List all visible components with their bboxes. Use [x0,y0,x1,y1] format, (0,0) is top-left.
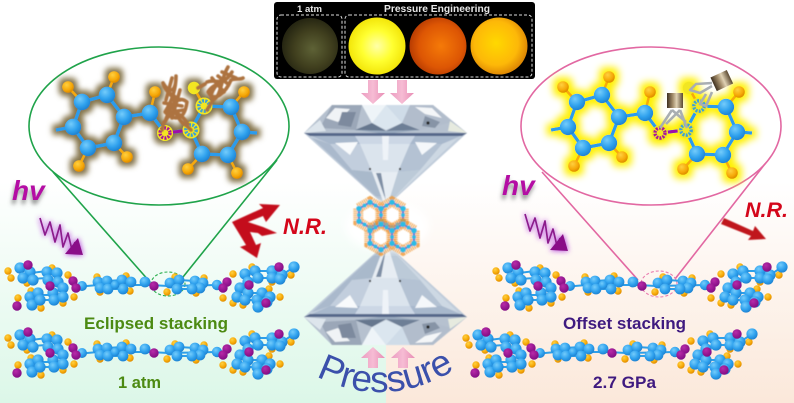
brown tangled rope [162,67,243,130]
label: offset stacking: Offset stacking [563,314,686,333]
diamond: bottom anvil [304,243,467,345]
wavy light arrow [525,214,568,251]
label: eclipsed stacking: Eclipsed stacking [84,314,228,333]
molecule stack: top row [4,260,300,313]
text: Pressure [318,354,452,392]
hexagon framework motif [345,200,429,252]
label: 1 atm: 1 atm [297,4,322,14]
zoom ellipse: green [29,47,289,205]
padlocks and chains [660,70,733,128]
diamond: top anvil [304,105,467,207]
dashed frame: 1 atm [277,15,342,77]
sample photo: orange-red [410,18,466,74]
zoom ellipse: pink [521,47,781,205]
background: green half [0,0,386,403]
panel: right offset stacking [462,47,788,392]
label: hv: hv [12,175,46,206]
molecule stack: bottom row [462,327,758,380]
panel: photo strip [274,2,535,79]
label: 2.7 GPa: 2.7 GPa [593,373,657,392]
curved pressure label [316,368,458,392]
label: 1 atm: 1 atm [118,374,161,392]
molecule stack: bottom row [4,327,300,380]
label: N.R.: N.R. [745,198,788,222]
label: hv: hv [502,170,536,201]
dashed frame: pressure [345,15,532,77]
dashed circle: pink [641,271,677,297]
background: peach half [386,0,794,403]
molecule stack: top row [492,260,788,313]
sample photo: yellow [348,18,406,74]
panel: left eclipsed stacking [4,47,327,392]
molecule with yellow glow [551,71,752,179]
label: pressure engineering: Pressure Engineering [384,4,490,15]
molecule with brown glow [56,71,257,179]
sample photo: amber [470,18,528,74]
zoom lines: pink [542,160,768,280]
label: N.R.: N.R. [283,214,327,239]
zoom lines: green [53,160,277,282]
wavy light arrow [40,218,83,255]
red arrow [721,218,766,240]
pink arrows: bottom [361,347,415,368]
red bounced arrow [232,204,280,258]
pink arrows: top [361,80,414,104]
dashed circle: green [151,272,185,296]
sample photo: dark [282,18,338,74]
